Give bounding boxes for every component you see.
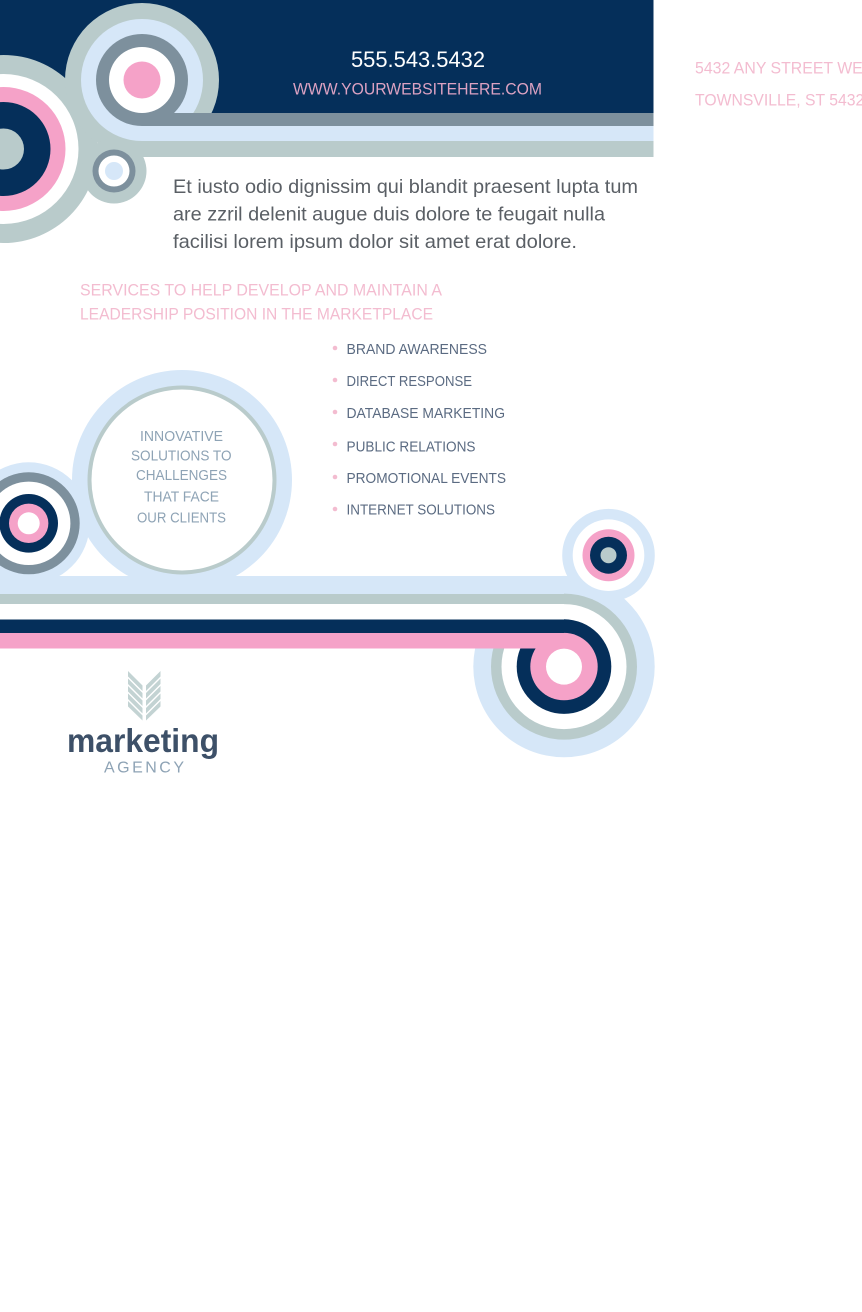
services list: PUBLIC RELATIONS <box>346 438 476 456</box>
lower stripe bands <box>0 576 564 648</box>
street address <box>695 58 862 110</box>
logo: marketing agency <box>67 671 219 776</box>
intro paragraph: are zzril delenit augue duis dolore te feugait nulla <box>173 204 605 226</box>
callout circle: innovative solutions: THAT FACE <box>144 488 219 506</box>
logo: marketing agency: marketing <box>67 722 219 759</box>
icon: chevron wheat mark <box>128 671 160 720</box>
icon: large left concentric circle <box>0 55 98 243</box>
callout circle: innovative solutions: CHALLENGES <box>136 467 227 484</box>
callout circle: innovative solutions: INNOVATIVE <box>140 428 223 445</box>
callout circle: innovative solutions: OUR CLIENTS <box>137 510 226 526</box>
services list: PROMOTIONAL EVENTS <box>346 470 506 487</box>
services list: BRAND AWARENESS <box>346 341 487 358</box>
icon: small concentric circle <box>82 138 146 204</box>
logo: marketing agency: AGENCY <box>104 760 184 776</box>
intro paragraph <box>173 176 638 253</box>
services heading <box>80 282 442 324</box>
icon: bottom right spiral circle <box>473 576 655 757</box>
header panel <box>0 0 654 113</box>
services list: DIRECT RESPONSE <box>346 373 472 390</box>
callout circle: innovative solutions: SOLUTIONS TO <box>131 448 232 464</box>
intro paragraph: Et iusto odio dignissim qui blandit praesent lupta tum <box>173 176 638 198</box>
intro paragraph: facilisi lorem ipsum dolor sit amet erat dolore. <box>173 231 577 253</box>
icon: top concentric circle <box>65 3 219 157</box>
services heading: SERVICES TO HELP DEVELOP AND MAINTAIN A <box>80 282 442 300</box>
icon: bottom left concentric circle <box>0 462 90 584</box>
services list: DATABASE MARKETING <box>346 405 505 422</box>
phone number: 555.543.5432 <box>351 47 485 72</box>
services list <box>333 341 506 518</box>
services heading: LEADERSHIP POSITION IN THE MARKETPLACE <box>80 306 433 324</box>
callout circle: innovative solutions <box>72 370 292 590</box>
icon: upper right concentric circle <box>562 509 655 602</box>
header stripe bands <box>142 113 654 157</box>
services list: INTERNET SOLUTIONS <box>346 502 495 518</box>
website address: WWW.YOURWEBSITEHERE.COM <box>293 80 542 98</box>
